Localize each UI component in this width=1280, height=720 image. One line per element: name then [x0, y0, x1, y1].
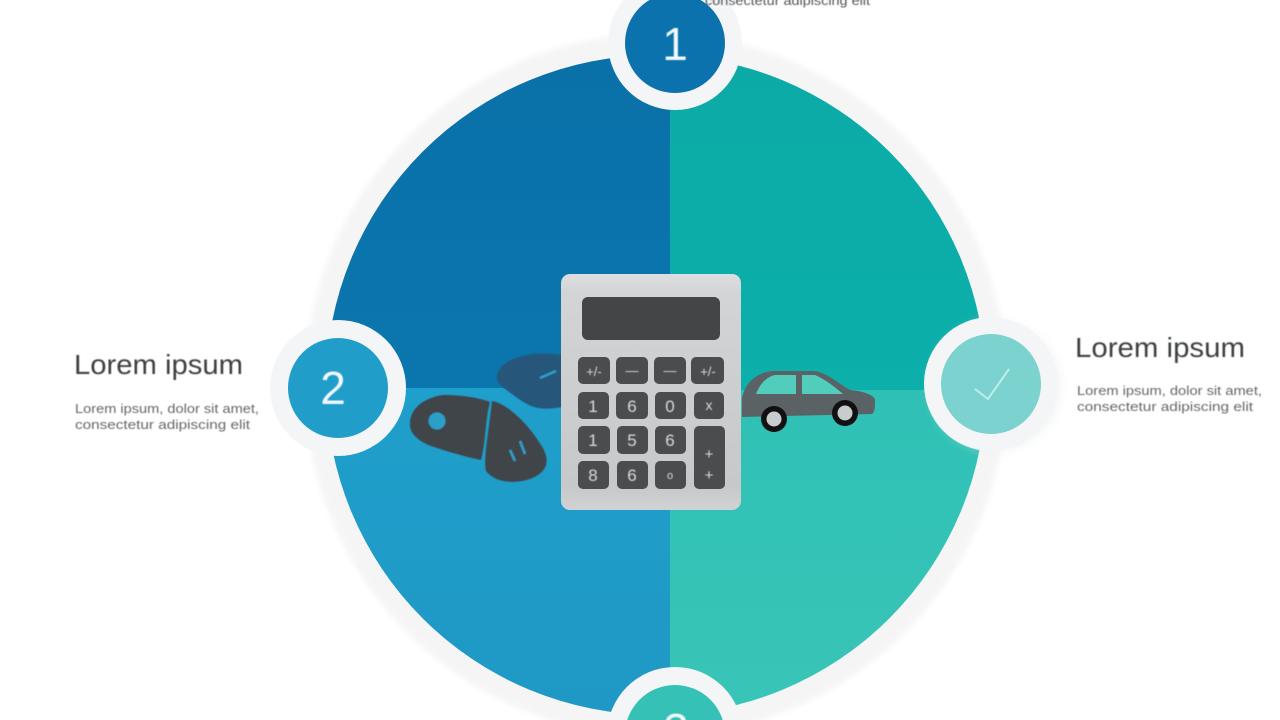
calculator key labels: x — [706, 397, 712, 413]
quadrant: bottom left — [320, 388, 670, 720]
key fob: upper — [497, 354, 562, 409]
body: step 2: Lorem ipsum, dolor sit amet, — [75, 401, 259, 416]
calculator key labels: 5 — [627, 431, 637, 450]
quadrant: bottom right — [670, 390, 990, 720]
calculator key labels: + — [705, 446, 714, 463]
step 2 badge — [270, 320, 406, 456]
icon: calculator — [561, 274, 741, 510]
body: step 2: consectetur adipiscing elit — [75, 417, 250, 432]
step 3 badge — [607, 667, 743, 720]
calculator key labels — [586, 363, 716, 485]
calculator display — [582, 297, 720, 340]
step 1 badge: 1 — [662, 18, 688, 70]
body: step 4: Lorem ipsum, dolor sit amet, — [1077, 383, 1262, 398]
calculator key labels: 0 — [665, 397, 675, 416]
calculator keypad — [578, 357, 725, 489]
calculator key labels: o — [667, 470, 673, 482]
heading: step 2: Lorem ipsum — [74, 349, 243, 380]
step 4 badge with check mark — [924, 317, 1058, 451]
calculator key labels: 1 — [588, 397, 598, 416]
text block: step 4 — [1075, 332, 1262, 414]
quadrant: top right — [670, 50, 990, 390]
step 1 badge — [608, 0, 742, 110]
heading: step 4: Lorem ipsum — [1075, 332, 1245, 363]
calculator key labels: 6 — [627, 466, 637, 485]
step 2 badge: 2 — [320, 362, 346, 414]
calculator key labels: 1 — [588, 431, 598, 450]
text block: step 2 — [74, 349, 259, 432]
calculator key labels: 6 — [627, 397, 637, 416]
icon: car — [742, 371, 875, 432]
calculator key labels: — — [626, 363, 638, 378]
quadrant: top left — [320, 50, 670, 388]
key fob: lower — [485, 401, 547, 482]
icon: check mark — [975, 369, 1009, 399]
car wheels — [761, 406, 787, 432]
calculator key labels: 8 — [588, 466, 598, 485]
calculator key labels: +/- — [700, 364, 716, 379]
calculator key labels: +/- — [586, 364, 602, 379]
key fob: left — [410, 395, 490, 460]
body: step 4: consectetur adipiscing elit — [1077, 399, 1253, 414]
calculator key labels: — — [664, 363, 676, 378]
calculator key labels: 6 — [665, 431, 675, 450]
icon: car keys — [410, 354, 562, 482]
outer ring — [305, 34, 1007, 720]
quadrant disc — [320, 50, 990, 720]
calculator key labels: + — [705, 467, 714, 484]
